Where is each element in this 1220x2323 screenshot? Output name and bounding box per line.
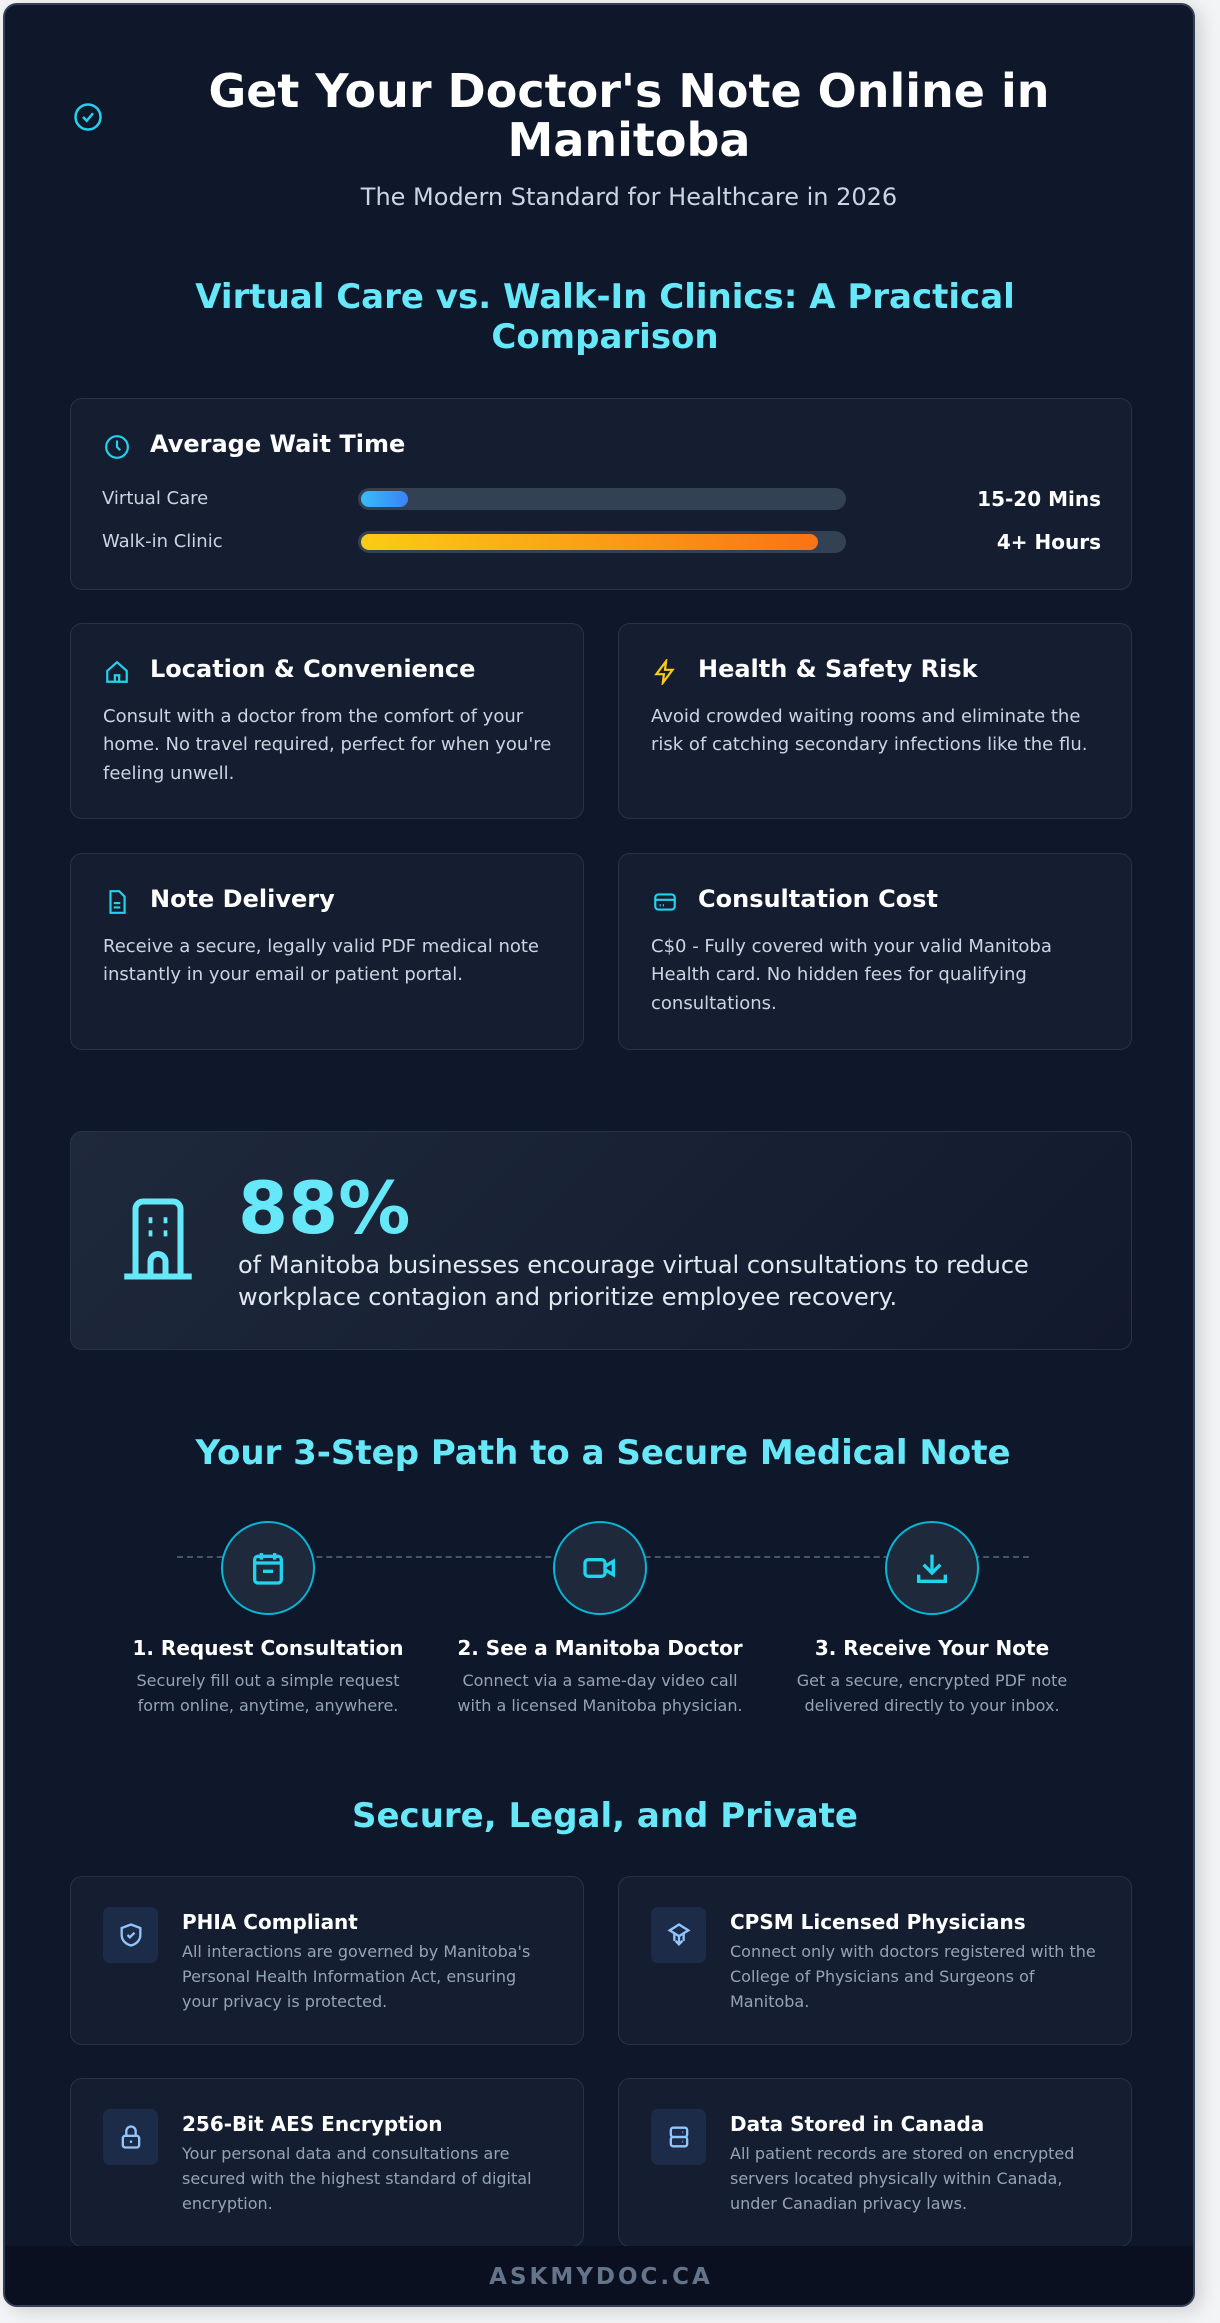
dashed connector line xyxy=(177,1556,1029,1558)
step 2 xyxy=(457,1521,743,1715)
icon: download xyxy=(885,1521,979,1615)
panel: cost xyxy=(618,853,1132,1050)
panel: encryption xyxy=(70,2078,584,2247)
step 2: with a licensed Manitoba physician. xyxy=(457,1696,743,1715)
panel: PHIA xyxy=(70,1876,584,2045)
step 3 xyxy=(797,1521,1067,1715)
row: walk-in clinic xyxy=(102,530,1101,554)
step 2: 2. See a Manitoba Doctor xyxy=(457,1636,743,1660)
heading: comparison: Virtual Care vs. Walk-In Clinics: A Practical Comparison xyxy=(195,277,1015,357)
row: virtual care xyxy=(102,487,1101,511)
step 1: form online, anytime, anywhere. xyxy=(138,1696,398,1715)
panel: location: Consult with a doctor from the comfort of your home. No travel required, perfect for when you're feeling unwell. xyxy=(103,706,551,784)
panel: cost: Consultation Cost xyxy=(698,885,938,913)
step 3: Get a secure, encrypted PDF note xyxy=(797,1671,1067,1690)
panel: note delivery xyxy=(70,853,584,1050)
panel: health risk xyxy=(618,623,1132,819)
panel: data in Canada: Data Stored in Canada xyxy=(730,2112,984,2136)
icon: shield xyxy=(103,1907,158,1963)
step 1 xyxy=(132,1521,404,1715)
icon: card xyxy=(654,893,676,911)
subtitle: The Modern Standard for Healthcare in 2026 xyxy=(361,183,897,211)
icon: check circle xyxy=(74,103,102,131)
footer: ASKMYDOC.CA xyxy=(489,2264,713,2290)
steps xyxy=(132,1521,1067,1715)
footer xyxy=(5,2246,1197,2309)
panel: health risk: Avoid crowded waiting rooms and eliminate the risk of catching secondary infections like the flu. xyxy=(651,706,1087,755)
panel: encryption: Your personal data and consultations are secured with the highest standard of digital encryption. xyxy=(182,2144,532,2213)
panel: CPSM: Connect only with doctors registered with the College of Physicians and Surgeons of Manitoba. xyxy=(730,1942,1096,2011)
icon: building xyxy=(124,1198,192,1280)
panel: data in Canada xyxy=(618,2078,1132,2247)
panel: PHIA: PHIA Compliant xyxy=(182,1910,358,1934)
heading: secure: Secure, Legal, and Private xyxy=(352,1796,858,1836)
step 3: 3. Receive Your Note xyxy=(815,1636,1049,1660)
icon: video xyxy=(553,1521,647,1615)
stat number: 88% xyxy=(238,1166,410,1250)
icon: server xyxy=(651,2109,706,2165)
row: virtual care: Virtual Care xyxy=(102,488,208,509)
panel: CPSM xyxy=(618,1876,1132,2045)
panel: 88% stat xyxy=(70,1131,1132,1350)
row: walk-in clinic: 4+ Hours xyxy=(997,530,1101,554)
panel: health risk: Health & Safety Risk xyxy=(698,655,978,683)
step 1: 1. Request Consultation xyxy=(132,1636,404,1660)
icon: badge xyxy=(651,1907,706,1963)
stat text: of Manitoba businesses encourage virtual consultations to reduce workplace contagion and prioritize employee recovery. xyxy=(238,1251,1029,1311)
panel: note delivery: Receive a secure, legally valid PDF medical note instantly in your email or patient portal. xyxy=(103,936,539,985)
icon: lightning xyxy=(654,659,675,685)
panel: average wait time: Average Wait Time xyxy=(150,430,405,458)
panel: encryption: 256-Bit AES Encryption xyxy=(182,2112,443,2136)
icon: file xyxy=(109,890,126,914)
panel: cost: C$0 - Fully covered with your valid Manitoba Health card. No hidden fees for qualifying consultations. xyxy=(651,936,1052,1014)
icon: house xyxy=(106,660,128,683)
step 1: Securely fill out a simple request xyxy=(137,1671,399,1690)
panel: data in Canada: All patient records are stored on encrypted servers located physically within Canada, under Canadian privacy laws. xyxy=(730,2144,1074,2213)
title: Get Your Doctor's Note Online in Manitoba xyxy=(208,64,1050,167)
step 2: Connect via a same-day video call xyxy=(462,1671,738,1690)
icon: lock xyxy=(103,2109,158,2165)
row: virtual care: 15-20 Mins xyxy=(977,487,1101,511)
panel: CPSM: CPSM Licensed Physicians xyxy=(730,1910,1026,1934)
step 3: delivered directly to your inbox. xyxy=(804,1696,1060,1715)
panel: average wait time xyxy=(70,398,1132,590)
panel: location: Location & Convenience xyxy=(150,655,475,683)
icon: calendar xyxy=(221,1521,315,1615)
row: walk-in clinic: Walk-in Clinic xyxy=(102,531,223,552)
panel: note delivery: Note Delivery xyxy=(150,885,335,913)
icon: clock xyxy=(105,435,129,459)
heading: 3-step path: Your 3-Step Path to a Secure Medical Note xyxy=(195,1433,1011,1473)
panel: location xyxy=(70,623,584,819)
panel: PHIA: All interactions are governed by Manitoba's Personal Health Information Act, ensuring your privacy is protected. xyxy=(182,1942,530,2011)
